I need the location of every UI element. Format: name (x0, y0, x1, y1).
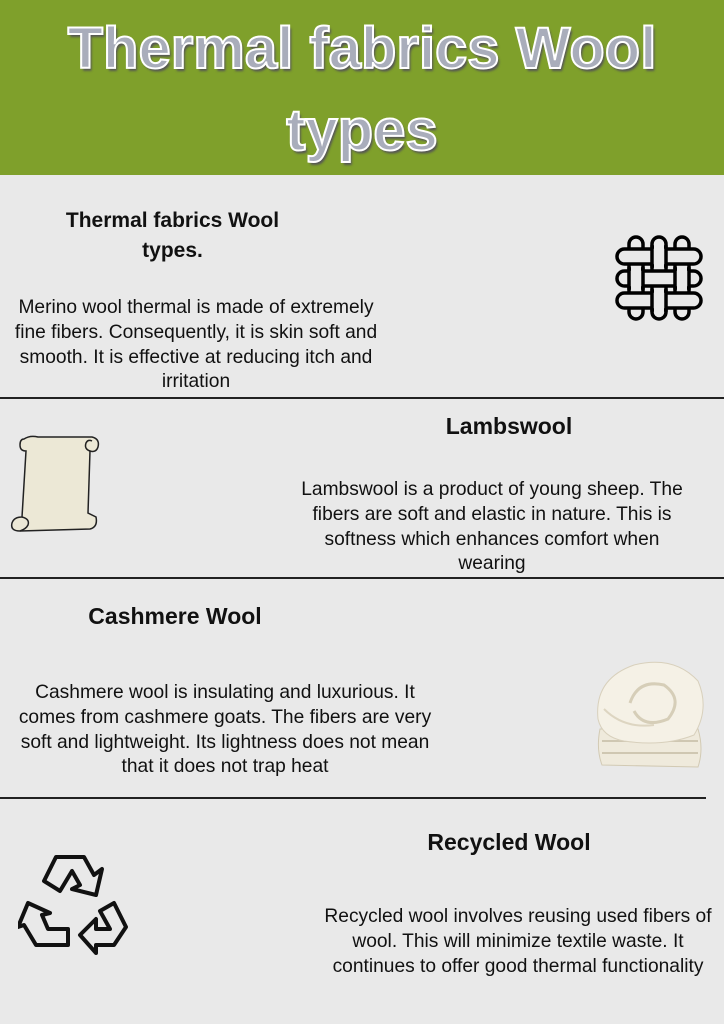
text: merino (15, 297, 377, 392)
panel: merino (15, 209, 703, 392)
text: cashmere: comes from cashmere goats. The fibers are very (19, 707, 431, 728)
text: recycled: Recycled wool involves reusing used fibers of (324, 906, 712, 927)
text: cashmere: soft and lightweight. Its lightness does not mean (21, 732, 429, 753)
icon: weave (615, 235, 703, 321)
icon: scroll (10, 436, 100, 532)
text: cashmere: that it does not trap heat (122, 756, 328, 777)
title (67, 16, 656, 166)
text: recycled (324, 906, 712, 977)
header banner (0, 0, 724, 175)
heading: recycled: Recycled Wool (427, 829, 591, 855)
text: lambswool: wearing (458, 553, 526, 574)
icon: folded cashmere (597, 662, 704, 768)
text: recycled: continues to offer good thermal functionality (333, 956, 703, 977)
icon: recycle (18, 855, 128, 955)
text: merino: fine fibers. Consequently, it is skin soft and (15, 322, 377, 343)
panel: cashmere (19, 603, 704, 777)
panel: recycled (18, 829, 712, 977)
text: merino: irritation (162, 371, 230, 392)
panel: lambswool (10, 413, 683, 574)
text: merino: smooth. It is effective at reducing itch and (20, 347, 372, 368)
text: lambswool: Lambswool is a product of young sheep. The (301, 479, 683, 500)
heading: lambswool: Lambswool (446, 413, 572, 439)
text: merino: Merino wool thermal is made of extremely (18, 297, 374, 318)
heading: cashmere: Cashmere Wool (88, 603, 262, 629)
title: Thermal fabrics Wool (68, 16, 656, 81)
heading: merino: Thermal fabrics Wool types. (66, 209, 279, 262)
text: lambswool (301, 479, 683, 574)
title: types (286, 98, 438, 163)
text: cashmere (19, 682, 432, 777)
text: recycled: wool. This will minimize textile waste. It (352, 931, 684, 952)
text: cashmere: Cashmere wool is insulating and luxurious. It (35, 682, 415, 703)
text: lambswool: softness which enhances comfort when (325, 529, 659, 550)
text: lambswool: fibers are soft and elastic in nature. This is (312, 504, 672, 525)
